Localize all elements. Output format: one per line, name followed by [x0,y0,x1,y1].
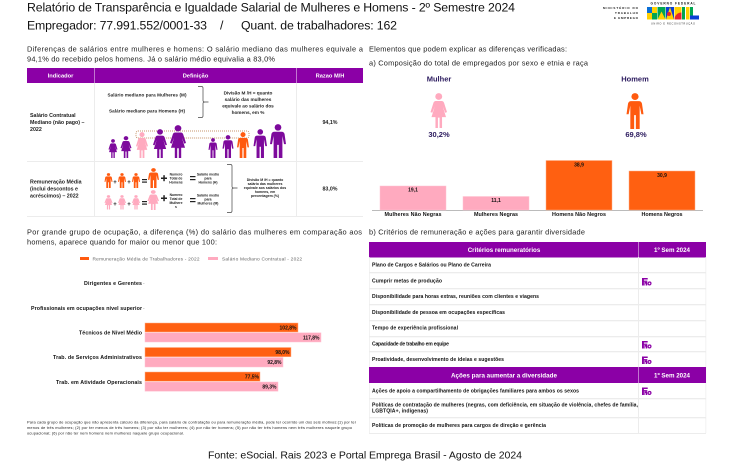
row: remuneração média: 83,0% [322,186,338,192]
bar chart: occupation groups: Trab. em Atividade Operacionais [56,380,142,386]
icon: woman 30,2%: 30,2% [428,130,450,139]
text: elements explaining differences: Elementos que podem explicar as diferenças verificadas: [369,44,567,54]
title: Relatório de Transparência e Igualdade Salarial de Mulheres e Homens - 2º Semestre 2024 [27,0,515,14]
bar chart: occupation groups: Trab. de Serviços Administrativos [53,355,142,361]
bar chart: occupation groups: Profissionais em ocupações nível superior [31,306,142,312]
row: salário contratual mediano: Salário Contratual [30,113,76,119]
bar chart: occupation groups: 77,5% [245,374,260,380]
table header [27,68,363,83]
bar chart: composition by sex and race: 38,9 [574,162,584,168]
row: remuneração média: s [175,205,177,209]
text: elements explaining differences [369,44,589,68]
row: salário contratual mediano: homens, em % [232,110,265,115]
row: remuneração média: salário das mulheres [248,182,282,186]
row: remuneração média: + [113,202,117,208]
logo: Ministério do Trabalho e Emprego [603,5,639,20]
row: salário contratual mediano: equivale ao salário dos [222,104,274,108]
title: / [220,18,224,32]
row: remuneração média: Mulhere [170,201,183,205]
legend: Remuneração Média de Trabalhadores - 2022 [92,256,200,262]
logo: Ministério do Trabalho e Emprego: TRABALHO [615,11,639,15]
row: remuneração média: (inclui descontos e [30,186,78,192]
row: remuneração média: Remuneração Média [30,180,82,186]
bar chart: occupation groups: 89,3% [262,384,277,390]
criteria rows: Disponibilidade para horas extras, reuniões com clientes e viagens [372,294,539,300]
bar chart: occupation groups: 92,8% [267,360,282,366]
logo: Governo Federal Brasil [647,1,699,26]
footnote: menos de três mulheres; (2) por ter menos de três homens; (3) por não ter mulheres; (4) por não ter homens; (5) por não ter três homens nem três mulheres naquele grupo [27,425,352,430]
logo: Governo Federal Brasil: GOVERNO FEDERAL [650,1,696,5]
criteria rows: Proatividade, desenvolvimento de ideias e sugestões [372,357,504,363]
icon: man 69,8% [621,74,649,139]
table header: criteria: 1º Sem 2024 [654,247,691,254]
row: remuneração média: + [127,180,131,186]
row: salário contratual mediano [30,86,338,133]
bar chart: occupation groups [31,281,321,391]
table header: diversity actions: 1º Sem 2024 [654,372,691,380]
row: remuneração média: Divisão M /H = quanto [247,178,283,182]
text: occupation group intro: homens, aparece quando for maior ou menor que 100: [27,238,217,246]
footnote: ocupacional; (6) por não ter nem homens nem mulheres naquele grupo ocupacional. [27,430,184,436]
text: salary differences intro [27,44,364,63]
row: remuneração média: Mulheres (M) [198,202,218,206]
row: remuneração média: Total de [170,197,182,201]
row: remuneração média: acréscimos) – 2022 [30,194,79,200]
diversity rows: Ações de apoio a compartilhamento de obrigações familiares para ambos os sexos [372,389,579,395]
legend: Salário Mediano Contratual - 2022 [222,256,302,262]
row: remuneração média: Numero [170,172,182,176]
logo: Ministério do Trabalho e Emprego: E EMPREGO [614,16,639,20]
icons: checked marks [642,278,651,395]
icon: man 69,8%: Homem [621,74,649,84]
diversity rows: Políticas de promoção de mulheres para cargos de direção e gerência [372,423,546,429]
table header: Definição [183,74,209,80]
bar chart: occupation groups: 102,8% [280,325,297,331]
criteria rows: Disponibilidade de pessoa em ocupações específicas [372,310,505,316]
legend [80,256,302,262]
title [27,0,515,32]
bar chart: occupation groups: 98,0% [275,350,290,356]
row: salário contratual mediano: Salário mediano para Homens (H) [109,108,185,114]
row: remuneração média: + [127,202,131,208]
row: salário contratual mediano: 94,1% [322,120,338,126]
icon: man 69,8%: 69,8% [625,130,647,139]
text: occupation group intro [27,228,362,246]
heading: criteria: b) Critérios de remuneração e ações para garantir diversidade [369,228,585,236]
row: remuneração média: + [113,180,117,186]
footnote [27,420,357,436]
row: salário contratual mediano: 2022 [30,127,42,133]
criteria rows: Tempo de experiência profissional [372,326,459,332]
panel: criteria table [369,242,706,434]
bar chart: composition by sex and race: Homens Não Negros [552,212,606,218]
icon: woman 30,2%: Mulher [427,74,451,84]
diversity rows: Políticas de contratação de mulheres (negras, com deficiência, em situação de violência, chefes de família, [372,403,639,409]
criteria rows [372,263,539,363]
logo: Governo Federal Brasil: UNIÃO E RECONSTRUÇÃO [651,20,695,26]
bar chart: composition by sex and race: Mulheres Não Negras [384,212,442,218]
bar chart: composition by sex and race: 19,1 [408,188,418,194]
bar chart: occupation groups: Dirigentes e Gerentes [84,281,142,287]
bar chart: occupation groups: 117,8% [303,335,320,341]
row: salário contratual mediano: Divisão M /H = quanto [224,90,273,96]
bar chart: composition by sex and race: 11,1 [491,198,501,204]
row: remuneração média: para [204,198,212,202]
row: remuneração média: Numero [170,193,182,197]
bar chart: composition by sex and race: Homens Negros [642,212,682,218]
row: remuneração média: Salário medio [197,194,219,198]
table header: criteria: Critérios remuneratórios [468,247,541,254]
row: remuneração média [30,164,338,212]
row: salário contratual mediano: Salário mediano para Mulheres (M) [108,92,187,98]
table header: criteria [369,242,706,258]
row: remuneração média: equivale aos salários dos [244,186,286,190]
icon: woman 30,2% [427,74,451,139]
criteria rows: Plano de Cargos e Salários ou Plano de Carreira [372,263,491,269]
row: salário contratual mediano: salário das mulheres [225,97,272,102]
row: salário contratual mediano: Mediano (não pago) – [30,120,84,126]
diversity rows: LGBTQIA+, indígenas) [372,409,428,415]
logo: Ministério do Trabalho e Emprego: MINISTÉRIO DO [603,5,639,10]
row: remuneração média: Salário medio [197,172,219,176]
row: remuneração média: Homens (H) [198,180,218,184]
criteria rows: Capacidade de trabalho em equipe [372,342,449,348]
title: Quant. de trabalhadores: 162 [241,18,397,32]
row: remuneração média: Total de [170,176,182,180]
row: remuneração média: Homens [169,180,183,184]
criteria rows: Cumprir metas de produção [372,279,442,285]
figures: salary median line-up [108,124,286,158]
text: occupation group intro: Por grande grupo de ocupação, a diferença (%) do salário das mulheres em comparação aos [27,228,362,236]
bar chart: composition by sex and race: Mulheres Negras [474,212,518,218]
table header: diversity actions [369,367,706,383]
table header: diversity actions: Ações para aumentar a diversidade [451,372,557,380]
table header: Razao M/H [316,74,344,80]
text: salary differences intro: 94,1% do recebido pelos homens. Já o salário médio equivalia a 83,0% [27,54,275,63]
diversity rows [372,389,639,429]
panel: indicator table [27,68,363,217]
title: Empregador: 77.991.552/0001-33 [27,18,207,32]
bar chart: occupation groups: Técnicos de Nível Médio [79,330,143,336]
row: remuneração média: para [204,176,212,180]
row: remuneração média: homens, em [255,190,275,194]
row: remuneração média: percentagem (%) [251,194,279,198]
bar chart: composition by sex and race [372,160,703,218]
table header: Indicador [48,74,74,80]
text: elements explaining differences: a) Composição do total de empregados por sexo e etnia e raça [369,58,589,68]
text: salary differences intro: Diferenças de salários entre mulheres e homens: O salário mediano das mulheres equivale a [27,44,364,54]
source line: Fonte: eSocial. Rais 2023 e Portal Emprega Brasil - Agosto de 2024 [208,450,522,462]
bar chart: composition by sex and race: 30,9 [657,173,667,179]
footnote: Para cada grupo de ocupação que não apresenta cálculo da diferença, para salário de contratação ou para remuneração média, pode ter ocorrido um dos seis motivos:(1) por ter [27,420,357,424]
